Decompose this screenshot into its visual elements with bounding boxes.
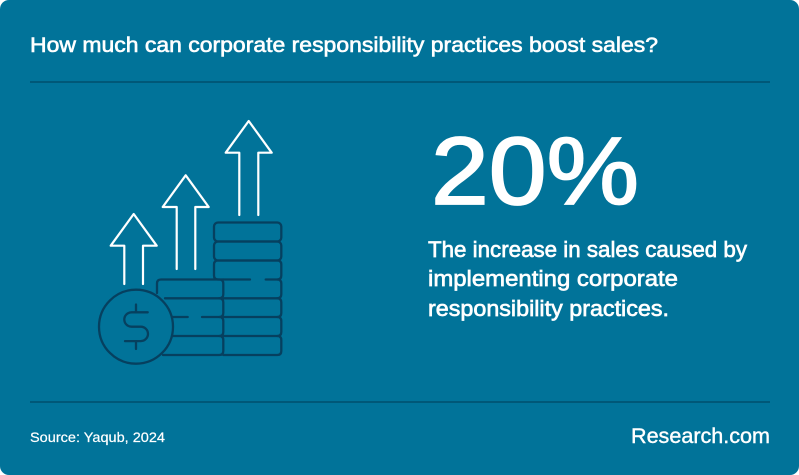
statistic description: implementing corporate (428, 266, 678, 291)
icon: coin stacks with rising arrows (99, 121, 281, 364)
statistic description (428, 237, 747, 321)
big statistic: 20% (431, 118, 639, 225)
brand logo: Research.com (631, 425, 770, 448)
icon: middle arrow (163, 175, 209, 269)
icon: large arrow (226, 121, 272, 215)
statistic description: responsibility practices. (428, 296, 669, 321)
statistic description: The increase in sales caused by (428, 237, 747, 262)
icon: tall coin stack (214, 222, 281, 355)
source note: Source: Yaqub, 2024 (30, 429, 165, 445)
icon: small arrow (111, 214, 157, 284)
icon: dollar coin (99, 290, 173, 364)
icon: short coin stack (157, 280, 223, 355)
title: How much can corporate responsibility practices boost sales? (30, 34, 658, 57)
